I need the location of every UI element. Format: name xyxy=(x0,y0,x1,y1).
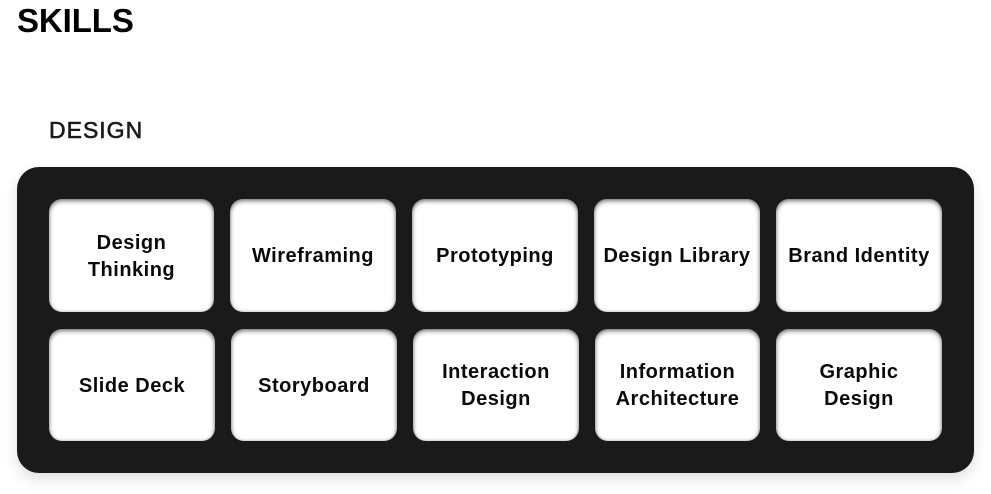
card: Design Thinking: Design xyxy=(97,232,166,254)
card: Interaction Design xyxy=(413,329,579,441)
card: Graphic Design: Design xyxy=(824,388,894,410)
card: Graphic Design xyxy=(776,329,942,441)
card: Brand Identity: Brand Identity xyxy=(788,245,930,267)
card: Slide Deck: Slide Deck xyxy=(79,374,185,396)
card: Prototyping xyxy=(412,199,578,312)
card: Prototyping: Prototyping xyxy=(436,245,554,267)
card: Interaction Design: Design xyxy=(461,388,531,410)
card: Wireframing xyxy=(230,199,396,312)
card: Graphic Design: Graphic xyxy=(819,361,899,383)
card: Storyboard: Storyboard xyxy=(258,374,370,396)
title: SKILLS xyxy=(17,2,134,39)
card: Design Thinking: Thinking xyxy=(88,258,175,280)
card: Information Architecture xyxy=(595,329,760,441)
card: Design Library: Design Library xyxy=(603,245,751,267)
card: Slide Deck xyxy=(49,329,215,441)
card: Design Library xyxy=(594,199,760,312)
card: Information Architecture: Architecture xyxy=(616,388,739,410)
heading: design: DESIGN xyxy=(49,117,143,143)
card: Wireframing: Wireframing xyxy=(252,245,374,267)
card: Design Thinking xyxy=(49,199,214,312)
panel: design skills xyxy=(17,167,974,473)
card: Storyboard xyxy=(231,329,397,441)
card: Interaction Design: Interaction xyxy=(442,361,550,383)
card: Information Architecture: Information xyxy=(620,361,735,383)
card: Brand Identity xyxy=(776,199,942,312)
